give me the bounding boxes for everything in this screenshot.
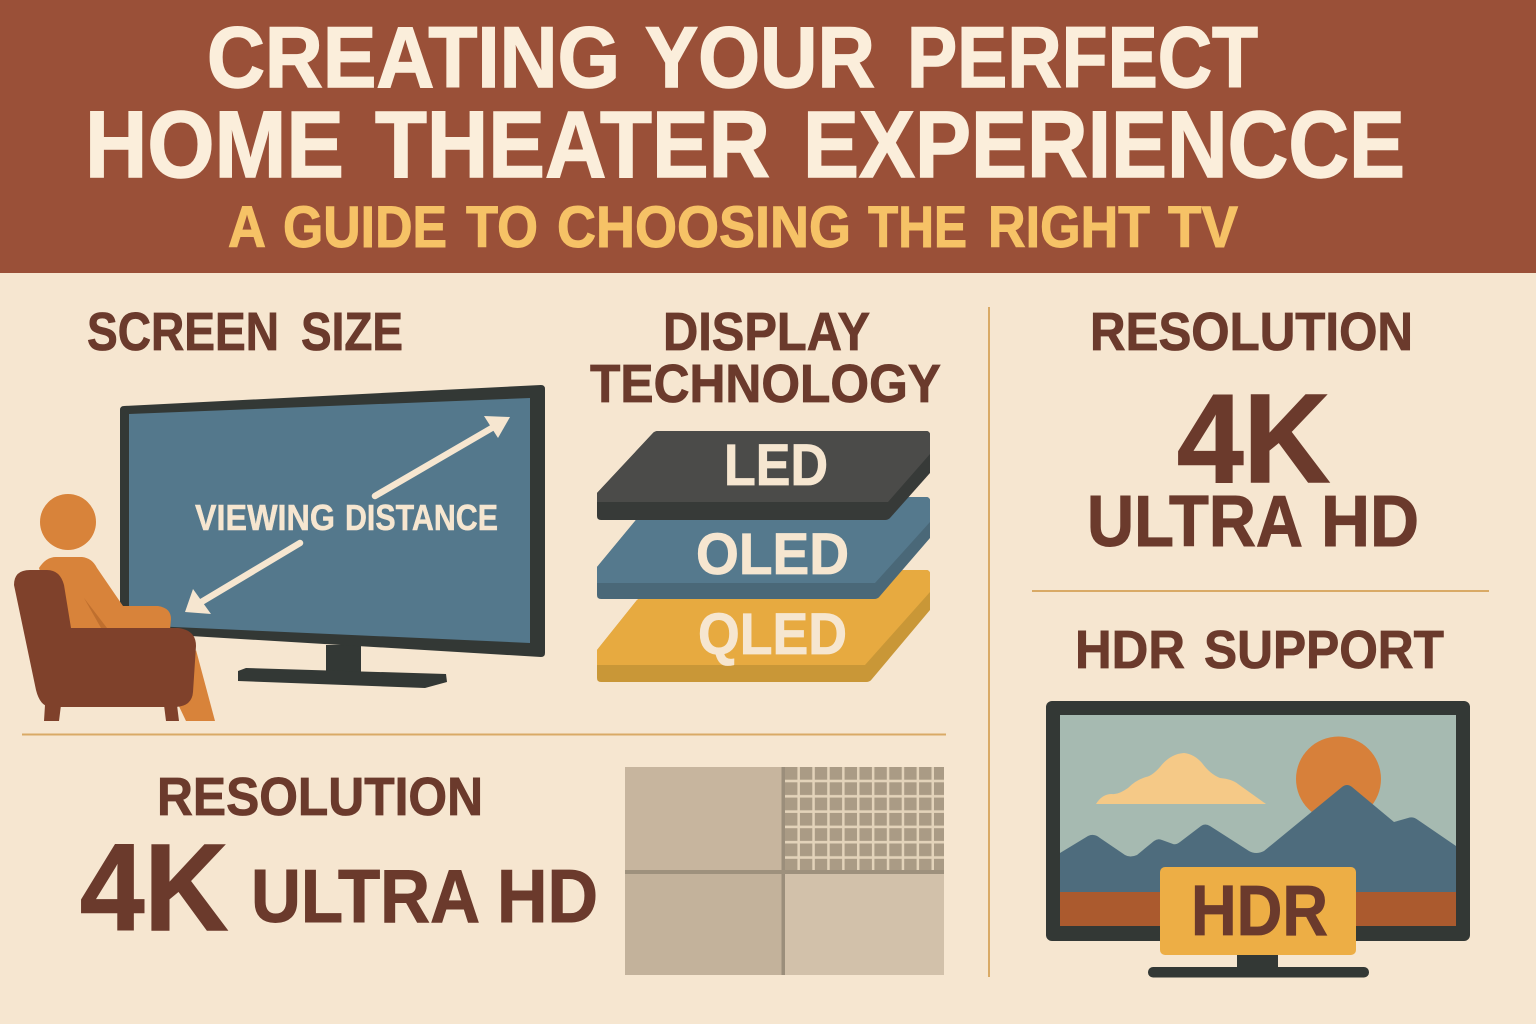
title line 2: EXPERIENCCE (803, 92, 1405, 198)
title line 2 (85, 92, 1405, 198)
label: viewing distance: VIEWING (195, 497, 335, 538)
sky (1060, 715, 1456, 893)
label: qled: QLED (698, 602, 847, 667)
arrow: up right (375, 416, 510, 496)
mountains (1060, 785, 1456, 893)
tv screen (129, 398, 530, 643)
title line 2: HOME (85, 92, 344, 198)
text: 4k: 4K (80, 820, 228, 957)
cloud (1096, 753, 1266, 804)
subtitle: CHOOSING (557, 195, 851, 260)
heading: display technology: DISPLAY (663, 302, 870, 362)
subtitle: A (228, 195, 266, 260)
title line 1: YOUR (645, 10, 875, 106)
divider lines (22, 307, 1489, 977)
layer: qled (597, 570, 930, 682)
heading: screen size: SIZE (301, 302, 403, 362)
text: ultra hd right: HD (1321, 482, 1419, 562)
sun (1296, 736, 1381, 822)
label: led: LED (724, 433, 828, 498)
subtitle (228, 195, 1238, 260)
label: viewing distance (195, 497, 498, 538)
resolution comparison grid (625, 767, 944, 975)
heading: hdr support (1075, 620, 1444, 680)
subtitle: TO (466, 195, 538, 260)
tv stand (238, 645, 447, 688)
title line 1: PERFECT (907, 10, 1258, 106)
ground band (1060, 892, 1456, 926)
label: hdr: HDR (1191, 872, 1328, 951)
armchair (14, 570, 196, 721)
tv frame (120, 385, 545, 657)
header banner (0, 0, 1536, 273)
illustration: tv with viewer (14, 385, 545, 721)
hdr tv frame (1046, 701, 1470, 941)
heading: display technology (590, 302, 941, 414)
hdr badge (1160, 867, 1356, 955)
heading: screen size: SCREEN (87, 302, 279, 362)
layer: led (597, 431, 930, 520)
hdr tv stand (1148, 950, 1369, 978)
text: 4k right: 4K (1177, 368, 1330, 509)
viewer: leg (176, 650, 215, 721)
heading: resolution right: RESOLUTION (1090, 302, 1413, 362)
text: ultra hd: ULTRA (251, 854, 480, 938)
viewer: torso (39, 557, 171, 632)
heading: hdr support: HDR (1075, 620, 1185, 680)
subtitle: RIGHT (988, 195, 1150, 260)
arrow: down left (185, 543, 300, 614)
heading: resolution lower left: RESOLUTION (157, 767, 483, 827)
subtitle: TV (1168, 195, 1238, 260)
text: ultra hd: HD (497, 854, 598, 938)
label: oled: OLED (696, 522, 849, 587)
viewer: head (40, 494, 96, 550)
illustration: hdr tv (1046, 701, 1470, 978)
subtitle: THE (868, 195, 967, 260)
title line 1: CREATING (207, 10, 620, 106)
text: ultra hd right: ULTRA (1087, 482, 1303, 562)
title line 1 (207, 10, 1258, 106)
subtitle: GUIDE (283, 195, 447, 260)
label: viewing distance: DISTANCE (345, 497, 498, 538)
heading: hdr support: SUPPORT (1204, 620, 1444, 680)
title line 2: THEATER (375, 92, 770, 198)
heading: display technology: TECHNOLOGY (590, 354, 941, 414)
layer: oled (597, 497, 930, 599)
